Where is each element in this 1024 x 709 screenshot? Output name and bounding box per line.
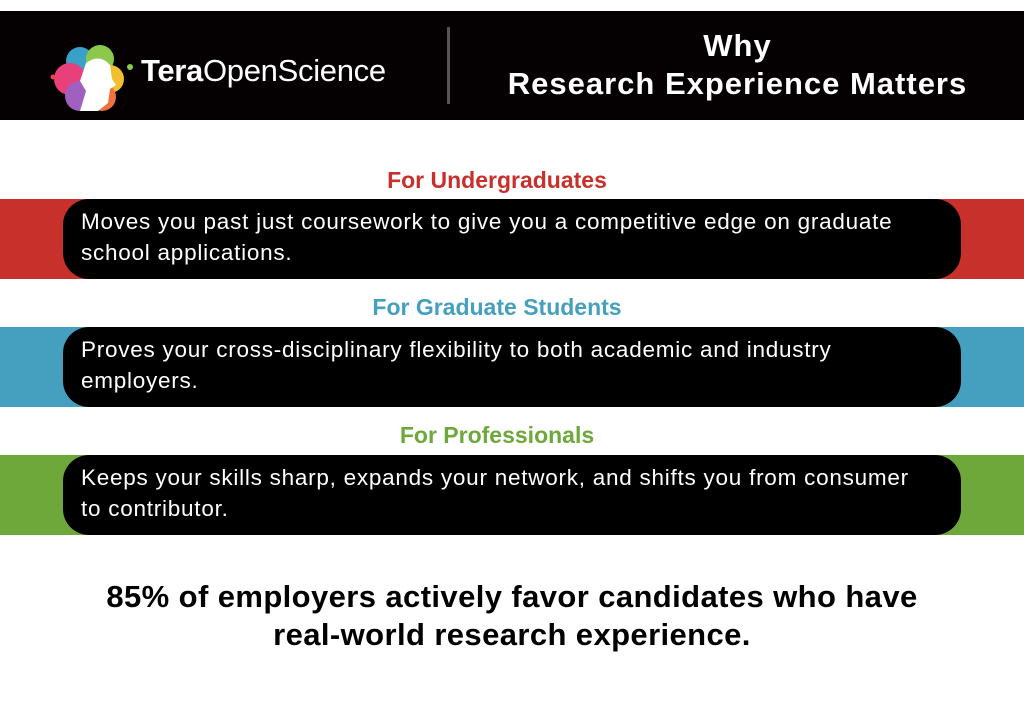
statistic callout	[106, 579, 918, 652]
text: undergraduates	[63, 199, 961, 279]
title	[508, 28, 967, 101]
heading: undergraduates: For Undergraduates	[387, 167, 607, 193]
title: Why	[703, 28, 772, 63]
heading: graduate students: For Graduate Students	[372, 294, 622, 320]
panel: graduate students	[0, 327, 1024, 407]
text: professionals	[63, 455, 961, 535]
panel: professionals	[0, 455, 1024, 535]
statistic callout: 85% of employers actively favor candidates who have	[106, 579, 918, 614]
logo icon	[50, 45, 133, 111]
text: professionals: to contributor.	[81, 496, 229, 521]
text: graduate: employers.	[81, 368, 199, 393]
text: graduate: Proves your cross-disciplinary flexibility to both academic and industry	[81, 337, 832, 362]
logo text: TeraOpenScience	[141, 53, 386, 88]
header bar	[0, 11, 1024, 120]
text: undergraduates: school applications.	[81, 240, 292, 265]
statistic callout: real-world research experience.	[273, 617, 751, 652]
title: Research Experience Matters	[508, 66, 967, 101]
text: undergraduates: Moves you past just coursework to give you a competitive edge on graduate	[81, 209, 892, 234]
text: graduate	[63, 327, 961, 407]
text: professionals: Keeps your skills sharp, expands your network, and shifts you from consumer	[81, 465, 909, 490]
panel: undergraduates	[0, 199, 1024, 279]
heading: professionals: For Professionals	[400, 422, 594, 448]
